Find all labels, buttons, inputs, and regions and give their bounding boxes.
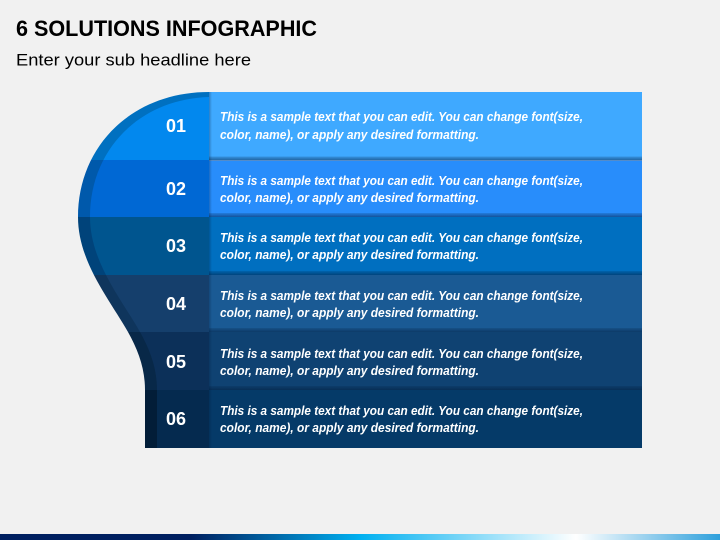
panel row 4: color, name), or apply any desired formatting. [220, 306, 479, 320]
panel left edge shadow [209, 92, 212, 448]
panel row 2: color, name), or apply any desired formatting. [220, 191, 479, 205]
panel row 1: This is a sample text that you can edit. You can change font(size, [220, 110, 583, 124]
panel row 5 [166, 332, 642, 390]
panel row 1: color, name), or apply any desired formatting. [220, 128, 479, 142]
bulb graphic [70, 92, 209, 448]
panel row 3 [166, 217, 642, 275]
panel row 5: 05 [166, 352, 186, 372]
subtitle: Enter your sub headline here [16, 50, 251, 70]
panel row 4: 04 [166, 294, 186, 314]
bottom gradient bar [0, 534, 720, 540]
bulb outer ring [70, 92, 209, 448]
panel row 2: 02 [166, 179, 186, 199]
panel row 5: color, name), or apply any desired formatting. [220, 364, 479, 378]
panel row 1: 01 [166, 116, 186, 136]
bulb inner fill [90, 97, 209, 448]
panel row 4 [166, 275, 642, 332]
panel row 2 [166, 160, 642, 217]
panel row 3: color, name), or apply any desired formatting. [220, 248, 479, 262]
title: 6 SOLUTIONS INFOGRAPHIC [16, 16, 317, 41]
panel row 6: color, name), or apply any desired formatting. [220, 421, 479, 435]
panel row 1 [166, 92, 642, 160]
panel row 6: 06 [166, 409, 186, 429]
panel row 6 [166, 390, 642, 448]
panel row 3: 03 [166, 236, 186, 256]
panel row 2: This is a sample text that you can edit. You can change font(size, [220, 174, 583, 188]
panel row 6: This is a sample text that you can edit. You can change font(size, [220, 404, 583, 418]
panel row 5: This is a sample text that you can edit. You can change font(size, [220, 347, 583, 361]
panel row 4: This is a sample text that you can edit. You can change font(size, [220, 289, 583, 303]
panel row 3: This is a sample text that you can edit. You can change font(size, [220, 231, 583, 245]
